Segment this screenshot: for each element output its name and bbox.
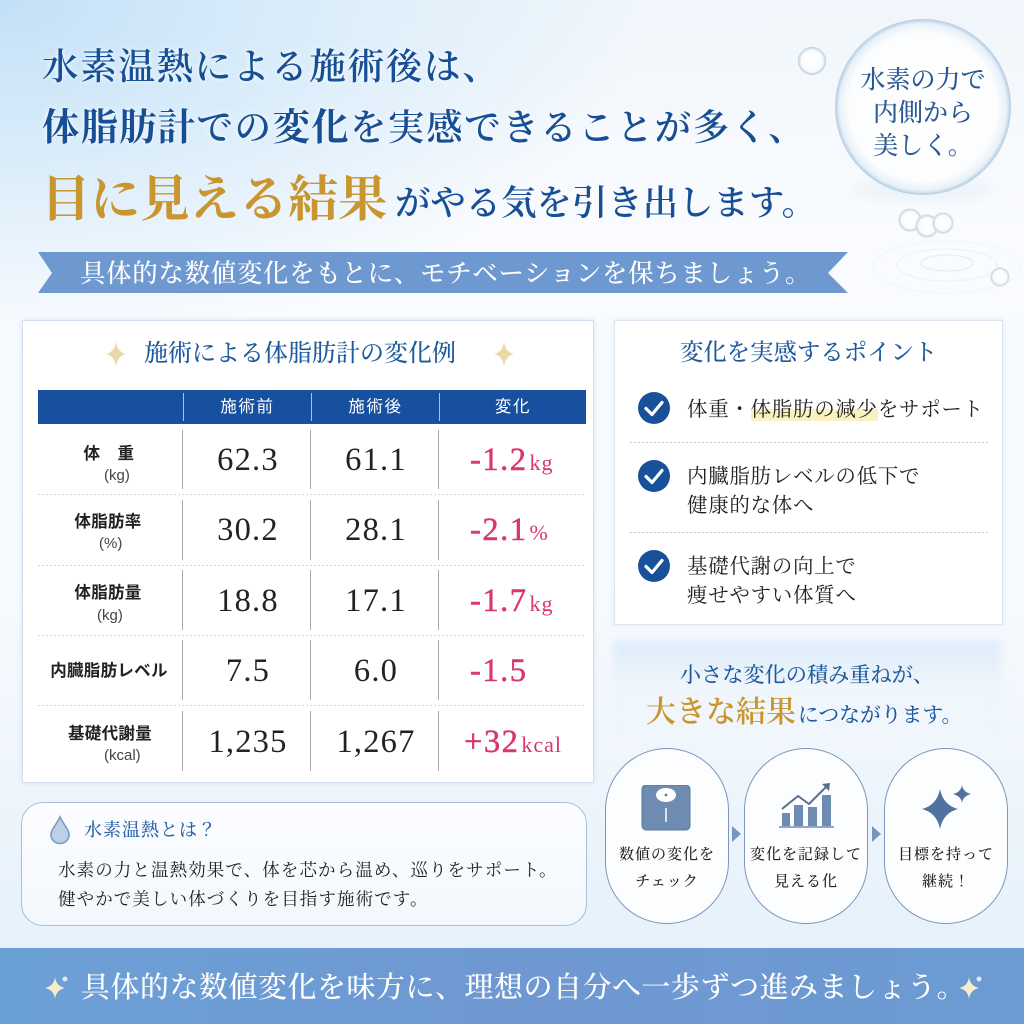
row: fat mass: 18.8 (217, 583, 279, 619)
panel: what is hydrogen thermal (21, 802, 587, 926)
row: basal metabolism: (kcal) (104, 747, 141, 764)
row: basal metabolism: 1,235 (208, 724, 288, 760)
message: small changes (612, 639, 1002, 729)
body text: 水素の力と温熱効果で、体を芯から温め、巡りをサポート。 (58, 860, 558, 880)
table (38, 390, 586, 424)
point 2: 健康的な体へ (687, 495, 814, 517)
point 3: 痩せやすい体質へ (687, 585, 857, 607)
icon: sparkles (922, 785, 971, 829)
step pill: record: 見える化 (774, 874, 838, 890)
row: basal metabolism: +32kcal (464, 724, 562, 760)
point 1 (638, 392, 984, 424)
table heading: 施術による体脂肪計の変化例 (144, 341, 456, 367)
arrow (732, 826, 741, 842)
banner text: 具体的な数値変化を味方に、理想の自分へ一歩ずつ進みましょう。 (81, 972, 966, 1004)
point 3: 基礎代謝の向上で (687, 556, 857, 578)
row: weight: 62.3 (217, 442, 279, 478)
row: fat mass: (kg) (97, 607, 123, 624)
panel heading: 変化を実感するポイント (680, 340, 937, 366)
row: basal metabolism (68, 724, 562, 764)
point 2: 内臓脂肪レベルの低下で (687, 466, 920, 488)
panel: points (614, 320, 1003, 625)
row: fat mass: 体脂肪量 (74, 584, 142, 602)
text: 具体的な数値変化をもとに、モチベーションを保ちましょう。 (80, 259, 811, 288)
row: visceral fat: 6.0 (354, 653, 398, 689)
arrow (872, 826, 881, 842)
icon: rising chart (779, 783, 834, 828)
body text (58, 860, 558, 909)
table header: 変化 (495, 398, 531, 416)
step pill: check: チェック (635, 874, 699, 890)
bubble text: 内側から (873, 100, 973, 127)
table header: 施術後 (348, 398, 403, 416)
step pill: goal: 目標を持って (898, 847, 994, 863)
sparkle right (959, 976, 982, 999)
heading: 水素温熱とは？ (84, 820, 217, 840)
sparkle left (45, 976, 68, 999)
row: basal metabolism: 1,267 (336, 724, 416, 760)
row: visceral fat: 7.5 (226, 653, 270, 689)
row: body fat percentage: 28.1 (345, 512, 407, 548)
title: 体脂肪計での変化を実感できることが多く、 (42, 107, 806, 149)
row: fat mass: -1.7kg (470, 583, 553, 619)
row: weight: 61.1 (345, 442, 407, 478)
row: visceral fat: 内臓脂肪レベル (50, 662, 168, 680)
bubble text: 美しく。 (873, 133, 973, 160)
large bubble (835, 19, 1011, 202)
row: weight: 体 重 (84, 445, 134, 463)
droplet bubble callout (798, 19, 1011, 287)
ripple and droplets (873, 209, 1021, 293)
step pill: record (744, 748, 868, 924)
subtitle ribbon (38, 252, 848, 293)
sparkle icons (106, 342, 514, 366)
table header: 施術前 (220, 398, 275, 416)
title (41, 46, 817, 227)
point 2 (638, 460, 920, 517)
icon: water drop (50, 815, 70, 844)
message: small changes: 小さな変化の積み重ねが、 (680, 663, 934, 687)
step pill: goal: 継続！ (922, 874, 970, 890)
title: がやる気を引き出します。 (395, 183, 817, 223)
step pill: record: 変化を記録して (750, 847, 862, 863)
message: small changes: 大きな結果につながります。 (646, 696, 962, 729)
row: weight (84, 442, 553, 484)
small bubble (798, 47, 826, 75)
point 3 (638, 550, 857, 607)
row: body fat percentage (74, 512, 549, 552)
icon: scale (642, 785, 690, 830)
row: body fat percentage: 30.2 (217, 512, 279, 548)
row: body fat percentage: (%) (99, 535, 122, 552)
panel: body fat table (22, 320, 594, 783)
row: fat mass (74, 583, 553, 624)
row: body fat percentage: -2.1% (470, 512, 549, 548)
step pill: check: 数値の変化を (619, 847, 715, 863)
point 1: 体重・体脂肪の減少をサポート (687, 399, 984, 421)
body text: 健やかで美しい体づくりを目指す施術です。 (58, 889, 429, 909)
row: visceral fat: -1.5 (470, 653, 527, 689)
title: 水素温熱による施術後は、 (42, 46, 500, 87)
row: weight: -1.2kg (470, 442, 553, 478)
step pill: goal (884, 748, 1008, 924)
row: weight: (kg) (104, 467, 130, 484)
title: 目に見える結果 (41, 172, 388, 227)
step pill: check (605, 748, 729, 924)
row: basal metabolism: 基礎代謝量 (68, 725, 152, 743)
bottom banner (0, 948, 1024, 1024)
row: visceral fat (50, 653, 527, 689)
row: body fat percentage: 体脂肪率 (74, 513, 142, 531)
row: fat mass: 17.1 (345, 583, 407, 619)
bubble text (860, 66, 986, 160)
table header (38, 390, 586, 424)
bubble text: 水素の力で (860, 67, 986, 94)
